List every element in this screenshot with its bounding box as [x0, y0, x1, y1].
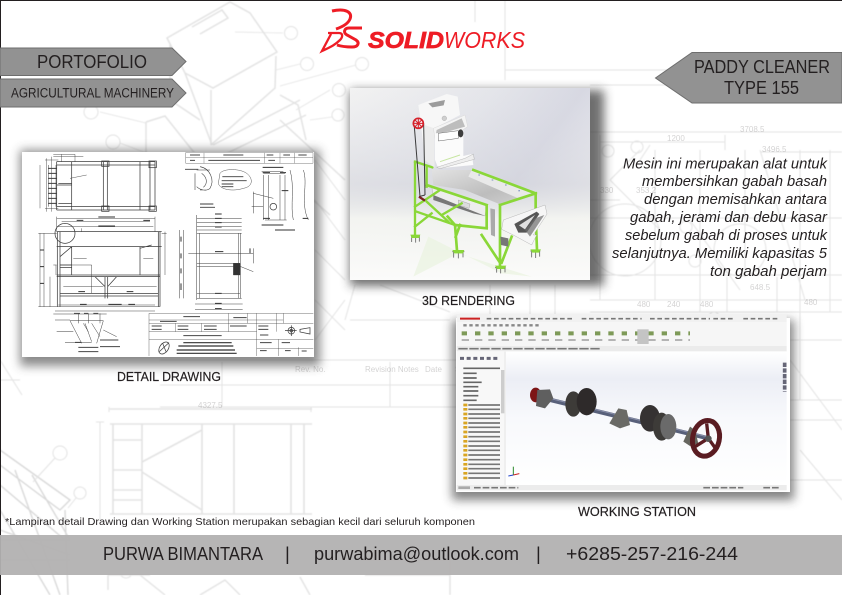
chute	[502, 205, 547, 245]
background: dimension numbers: 3708.5	[740, 125, 765, 134]
background: dimension numbers: Signature	[455, 365, 490, 374]
front view	[57, 232, 162, 307]
text block: machine description	[612, 156, 828, 280]
text block: machine description: sebelum gabah di proses untuk	[625, 227, 828, 244]
centre-top title block lines	[160, 0, 842, 407]
panel: detail drawing	[20, 150, 320, 384]
right side CAD	[590, 132, 842, 500]
banner: agricultural machinery: AGRICULTURAL MACHINERY	[11, 86, 174, 100]
icon: DS mark	[322, 10, 362, 51]
banner: paddy cleaner type 155	[656, 52, 842, 103]
icon: machine render	[410, 94, 547, 277]
background: dimension numbers: Date	[425, 365, 442, 374]
detail B	[53, 313, 117, 343]
panel: working station	[452, 314, 794, 519]
viewport shading	[506, 352, 787, 485]
centre frame	[110, 409, 312, 514]
title block	[149, 313, 313, 356]
toolbar	[457, 314, 787, 322]
caption: WORKING STATION	[578, 504, 696, 519]
status bar	[457, 485, 787, 490]
upper housing	[418, 94, 460, 167]
panel: 3D rendering	[350, 88, 604, 308]
triad	[512, 467, 515, 475]
banner: agricultural machinery	[0, 79, 186, 107]
logo: SolidWorks	[322, 10, 525, 53]
background: dimension numbers	[198, 125, 818, 410]
text block: machine description: selanjutnya. Memiliki kapasitas 5	[612, 245, 828, 262]
footer contact bar: purwabima@outlook.com	[314, 543, 519, 564]
footer contact bar: PURWA BIMANTARA	[103, 543, 264, 564]
text block: machine description: gabah, jerami dan debu kasar	[630, 209, 828, 226]
background: dimension numbers: Revision Notes	[365, 365, 419, 374]
text block: machine description: dengan memisahkan antara	[644, 191, 827, 208]
banner: paddy cleaner type 155: TYPE 155	[724, 78, 799, 98]
feet	[411, 236, 540, 273]
tree panel	[457, 352, 506, 485]
lower-left frame	[0, 450, 70, 595]
background: dimension numbers: 353.2	[636, 186, 657, 195]
wordmark: WORKS: WORKS	[444, 27, 525, 53]
banner: portofolio: PORTOFOLIO	[37, 51, 147, 72]
detail section top right	[195, 167, 212, 190]
caption: DETAIL DRAWING	[117, 369, 221, 384]
background: dimension numbers: 480	[637, 300, 651, 309]
background: dimension numbers: 4327.5	[198, 401, 223, 410]
background: dimension numbers: 480	[804, 298, 818, 307]
text block: machine description: membersihkan gabah basah	[642, 173, 827, 190]
left side strokes	[0, 160, 555, 395]
text block: machine description: Mesin ini merupakan alat untuk	[623, 156, 828, 172]
background: dimension numbers: 480	[700, 300, 714, 309]
belt and wheel	[414, 123, 425, 197]
background: dimension numbers: Rev. No.	[295, 365, 326, 374]
wordmark: SOLID: SOLID	[368, 27, 444, 53]
right task pane	[779, 363, 790, 392]
banner: paddy cleaner type 155: PADDY CLEANER	[694, 57, 830, 77]
icon: shaft assembly	[540, 397, 708, 438]
footnote: *Lampiran detail Drawing dan Working Station merupakan sebagian kecil dari seluruh komponen	[5, 516, 475, 528]
footer contact bar: |	[285, 543, 290, 564]
background: dimension numbers: 1200	[667, 134, 685, 143]
side view	[179, 215, 253, 309]
background: dimension numbers: 648.5	[750, 283, 771, 292]
text block: machine description: ton gabah perjam	[710, 263, 827, 280]
footer contact bar: |	[536, 543, 541, 564]
footer contact bar: +6285-257-216-244	[566, 543, 738, 564]
background: dimension numbers: 240	[667, 300, 681, 309]
revision table	[186, 153, 313, 163]
green frame	[415, 162, 537, 267]
footer contact bar	[0, 535, 842, 575]
banner: portofolio	[0, 48, 186, 76]
background: dimension numbers: 330	[600, 186, 614, 195]
caption: 3D RENDERING	[422, 293, 515, 308]
sieve deck	[432, 170, 535, 205]
top view	[57, 162, 155, 210]
background: dimension numbers: 3496.5	[762, 145, 787, 154]
